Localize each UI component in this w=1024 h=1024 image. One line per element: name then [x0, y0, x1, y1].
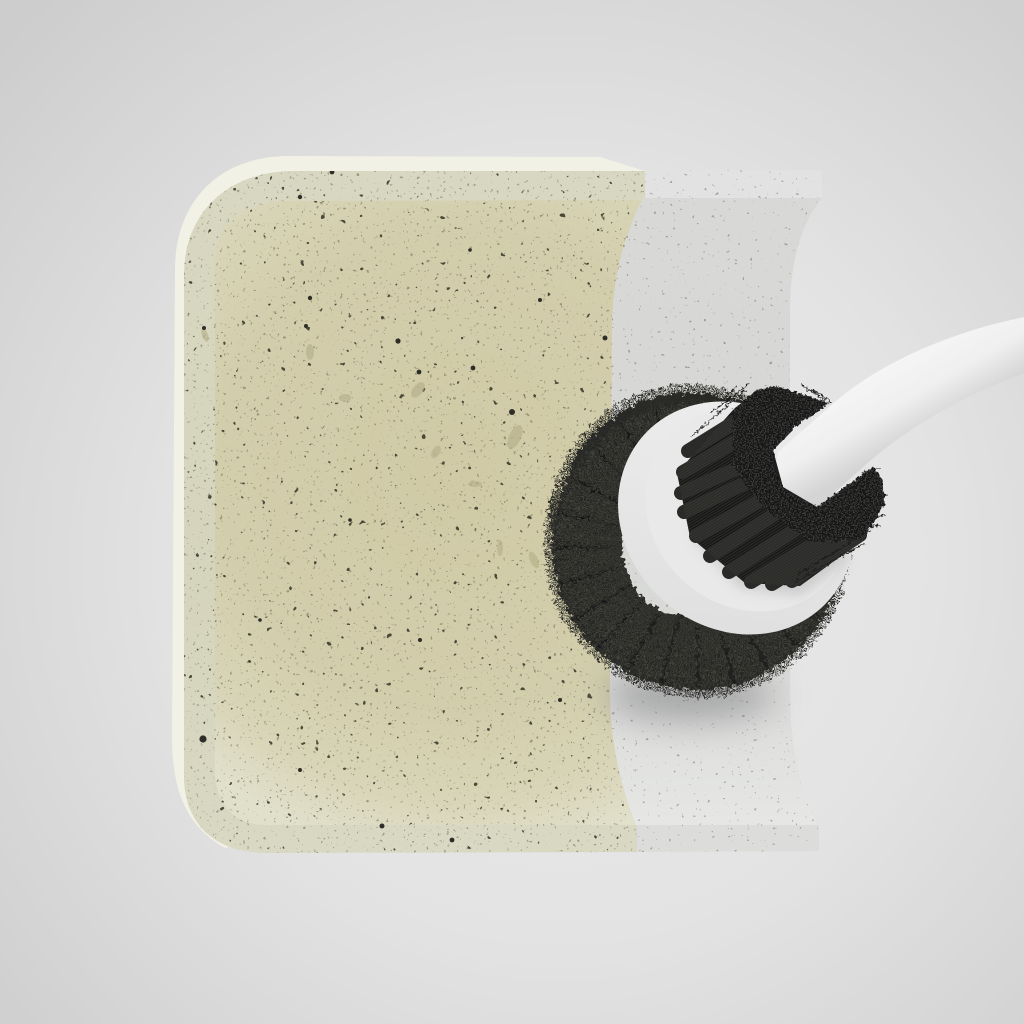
shadow of tuft on disc	[690, 470, 850, 596]
clean bottom band	[637, 825, 819, 852]
tuft sides	[681, 420, 860, 584]
clean grey wall	[610, 198, 822, 825]
brush	[550, 316, 1024, 692]
outer cream rim	[172, 156, 645, 848]
brush shadow	[605, 669, 775, 721]
handle shaft	[777, 316, 1024, 509]
faint speckles on clean wall	[605, 165, 830, 860]
brush head disc	[570, 353, 902, 683]
fine tuft hairs	[692, 384, 888, 582]
large pale blotches	[200, 327, 541, 570]
beige stained band	[184, 171, 645, 853]
bristle tips top surface	[732, 386, 886, 544]
front bristle tufts	[677, 384, 888, 586]
beige stained inner wall	[215, 200, 643, 825]
back bristles	[550, 395, 844, 692]
dark speckles on stain	[170, 150, 650, 860]
tuft hair texture	[677, 390, 863, 586]
basin cross-section	[170, 150, 830, 860]
large dark specks	[199, 170, 608, 842]
clean top band	[645, 170, 822, 198]
